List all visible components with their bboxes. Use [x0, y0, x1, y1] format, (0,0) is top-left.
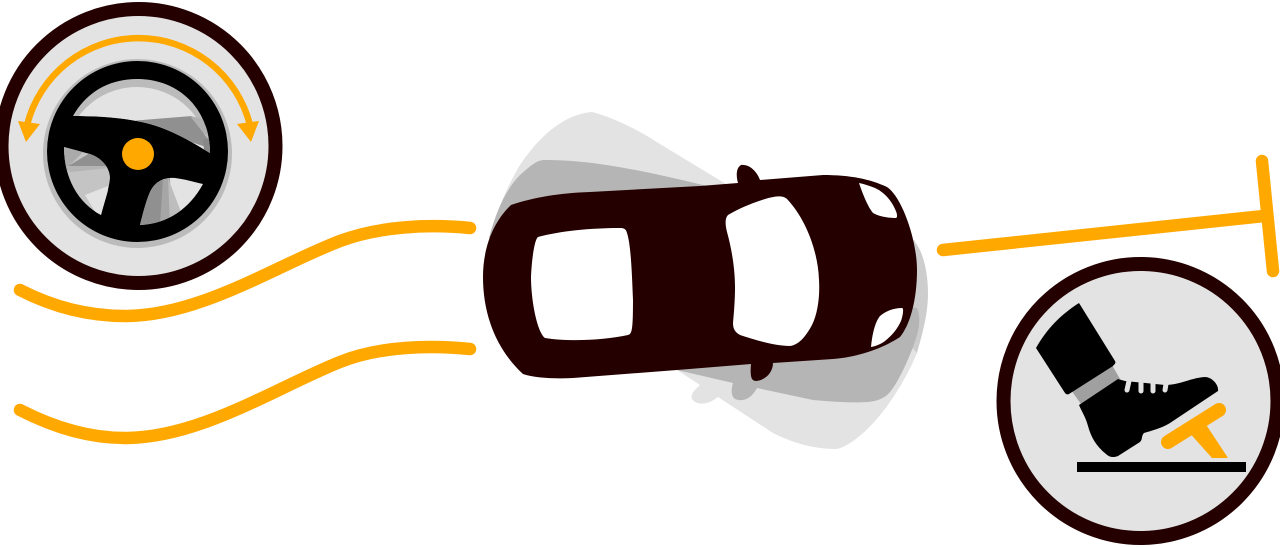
panel ring — [2, 9, 276, 283]
lower left opening — [64, 147, 110, 215]
lower headlight — [871, 308, 903, 347]
trouser leg — [1036, 303, 1115, 394]
sock — [1071, 365, 1120, 404]
road lines — [20, 226, 470, 438]
top opening — [73, 79, 210, 153]
upper road line — [20, 226, 470, 316]
car motion ghosts — [489, 112, 928, 449]
panel ring — [1004, 264, 1278, 538]
turning arrow — [18, 38, 259, 142]
rear window — [531, 228, 633, 340]
car — [483, 165, 917, 381]
stopping line — [943, 161, 1273, 271]
shoe — [1079, 377, 1218, 457]
floor bar — [1077, 462, 1246, 472]
windshield — [726, 196, 819, 346]
lower road line — [20, 347, 470, 438]
horn button — [122, 138, 154, 170]
steering wheel — [43, 59, 232, 248]
medium ghost — [489, 160, 919, 402]
lower right opening — [140, 178, 203, 225]
pedal panel — [1004, 264, 1278, 538]
car body — [483, 165, 917, 381]
medium ghost edge — [905, 240, 928, 353]
steering panel — [2, 9, 276, 283]
pedal — [1168, 410, 1228, 458]
upper headlight — [859, 183, 897, 218]
laces — [1127, 381, 1166, 391]
light ghost — [489, 112, 917, 449]
